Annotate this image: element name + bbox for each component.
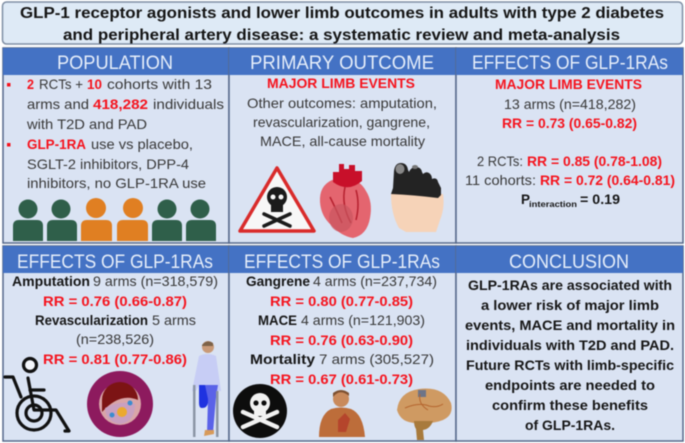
- panel: conclusion: [456, 246, 683, 441]
- gangrene MACE mortality results: RR = 0.80 (0.77-0.85): [270, 293, 413, 309]
- icon: gangrene foot: [391, 163, 444, 232]
- conclusion text: of GLP-1RAs.: [525, 417, 615, 433]
- conclusion text: a lower risk of major limb: [481, 297, 659, 313]
- conclusion text: confirm these benefits: [492, 397, 648, 413]
- heading: effects: EFFECTS OF GLP-1RAs: [17, 252, 213, 273]
- amputation and revascularization results: [12, 273, 218, 367]
- major limb events results: RR = 0.73 (0.65-0.82): [502, 115, 637, 131]
- population text: RCTs +: [39, 76, 83, 92]
- primary outcome text: [247, 75, 437, 149]
- population text: arms and: [27, 96, 89, 112]
- conclusion text: endpoints are needed to: [485, 377, 655, 393]
- gangrene MACE mortality results: [246, 273, 437, 387]
- conclusion text: individuals with T2D and PAD.: [466, 337, 674, 353]
- panel: primary outcome: [229, 48, 456, 243]
- icon: people row: [13, 198, 216, 241]
- primary outcome text: revascularization, gangrene,: [253, 114, 430, 130]
- major limb events results: 2 RCTs:: [477, 153, 523, 169]
- gangrene MACE mortality results: RR = 0.76 (0.63-0.90): [270, 332, 413, 348]
- gangrene MACE mortality results: Gangrene: [246, 273, 310, 289]
- population text: GLP-1RA: [27, 136, 86, 152]
- amputation and revascularization results: RR = 0.76 (0.66-0.87): [43, 293, 187, 309]
- title banner: and peripheral artery disease: a systematic review and meta-analysis: [63, 27, 620, 44]
- icon: artery cross-section: [87, 371, 153, 437]
- major limb events results: = 0.19: [580, 191, 620, 207]
- icon: heart: [320, 164, 371, 238]
- icon: brain: [397, 389, 452, 440]
- title banner: GLP-1 receptor agonists and lower limb outcomes in adults with type 2 diabetes: [20, 5, 664, 22]
- population text: 2: [27, 76, 34, 92]
- population text: 10: [87, 76, 102, 92]
- icon: wheelchair: [5, 358, 69, 431]
- amputation and revascularization results: Amputation: [12, 273, 90, 289]
- gangrene MACE mortality results: 4 arms (n=237,734): [313, 273, 437, 289]
- title banner: [2, 2, 682, 44]
- population text: inhibitors, no GLP-1RA use: [27, 175, 206, 191]
- major limb events results: interaction: [529, 200, 577, 209]
- heading: population: POPULATION: [57, 53, 173, 74]
- amputation and revascularization results: RR = 0.81 (0.77-0.86): [43, 351, 187, 367]
- panel: effects major limb events: [456, 48, 683, 243]
- amputation and revascularization results: Revascularization: [35, 312, 148, 328]
- conclusion text: Future RCTs with limb-specific: [466, 357, 674, 373]
- panel: gangrene MACE mortality: [229, 246, 456, 441]
- primary outcome text: MACE, all-cause mortality: [260, 133, 425, 149]
- major limb events results: 11 cohorts:: [465, 172, 536, 188]
- amputation and revascularization results: 9 arms (n=318,579): [93, 273, 218, 289]
- icon: man with chest pain: [319, 390, 365, 437]
- icon: skull circle: [233, 384, 287, 438]
- gangrene MACE mortality results: RR = 0.67 (0.61-0.73): [270, 371, 413, 387]
- heading: effects: EFFECTS OF GLP-1RAs: [244, 252, 440, 273]
- population text: [7, 76, 224, 191]
- gangrene MACE mortality results: MACE: [258, 312, 297, 328]
- panel: population: [3, 48, 229, 243]
- major limb events results: [465, 76, 675, 209]
- primary outcome text: Other outcomes: amputation,: [247, 95, 437, 111]
- population text: cohorts with 13: [107, 76, 212, 92]
- icon: amputee man: [192, 341, 221, 437]
- population text: with T2D and PAD: [26, 116, 147, 132]
- population text: use vs placebo,: [91, 136, 193, 152]
- icon: warning skull: [240, 168, 314, 231]
- population text: SGLT-2 inhibitors, DPP-4: [27, 156, 189, 172]
- conclusion text: events, MACE and mortality in: [465, 317, 675, 333]
- population text: 418,282: [93, 96, 148, 112]
- heading: effects: EFFECTS OF GLP-1RAs: [472, 53, 668, 74]
- gangrene MACE mortality results: Mortality: [250, 351, 315, 367]
- major limb events results: P: [521, 191, 530, 207]
- heading: conclusion: CONCLUSION: [509, 252, 629, 273]
- primary outcome text: MAJOR LIMB EVENTS: [267, 75, 415, 91]
- major limb events results: RR = 0.85 (0.78-1.08): [527, 153, 662, 169]
- gangrene MACE mortality results: 4 arms (n=121,903): [301, 312, 425, 328]
- panel: amputation and revascularization: [3, 246, 229, 441]
- amputation and revascularization results: (n=238,526): [76, 331, 154, 347]
- major limb events results: RR = 0.72 (0.64-0.81): [540, 172, 675, 188]
- heading: primary outcome: PRIMARY OUTCOME: [250, 53, 434, 74]
- population text: individuals: [153, 96, 224, 112]
- major limb events results: MAJOR LIMB EVENTS: [495, 76, 642, 92]
- major limb events results: 13 arms (n=418,282): [504, 96, 636, 112]
- conclusion text: GLP-1RAs are associated with: [468, 277, 672, 293]
- amputation and revascularization results: 5 arms: [152, 312, 196, 328]
- gangrene MACE mortality results: 7 arms (305,527): [319, 351, 434, 367]
- conclusion text: [465, 277, 675, 433]
